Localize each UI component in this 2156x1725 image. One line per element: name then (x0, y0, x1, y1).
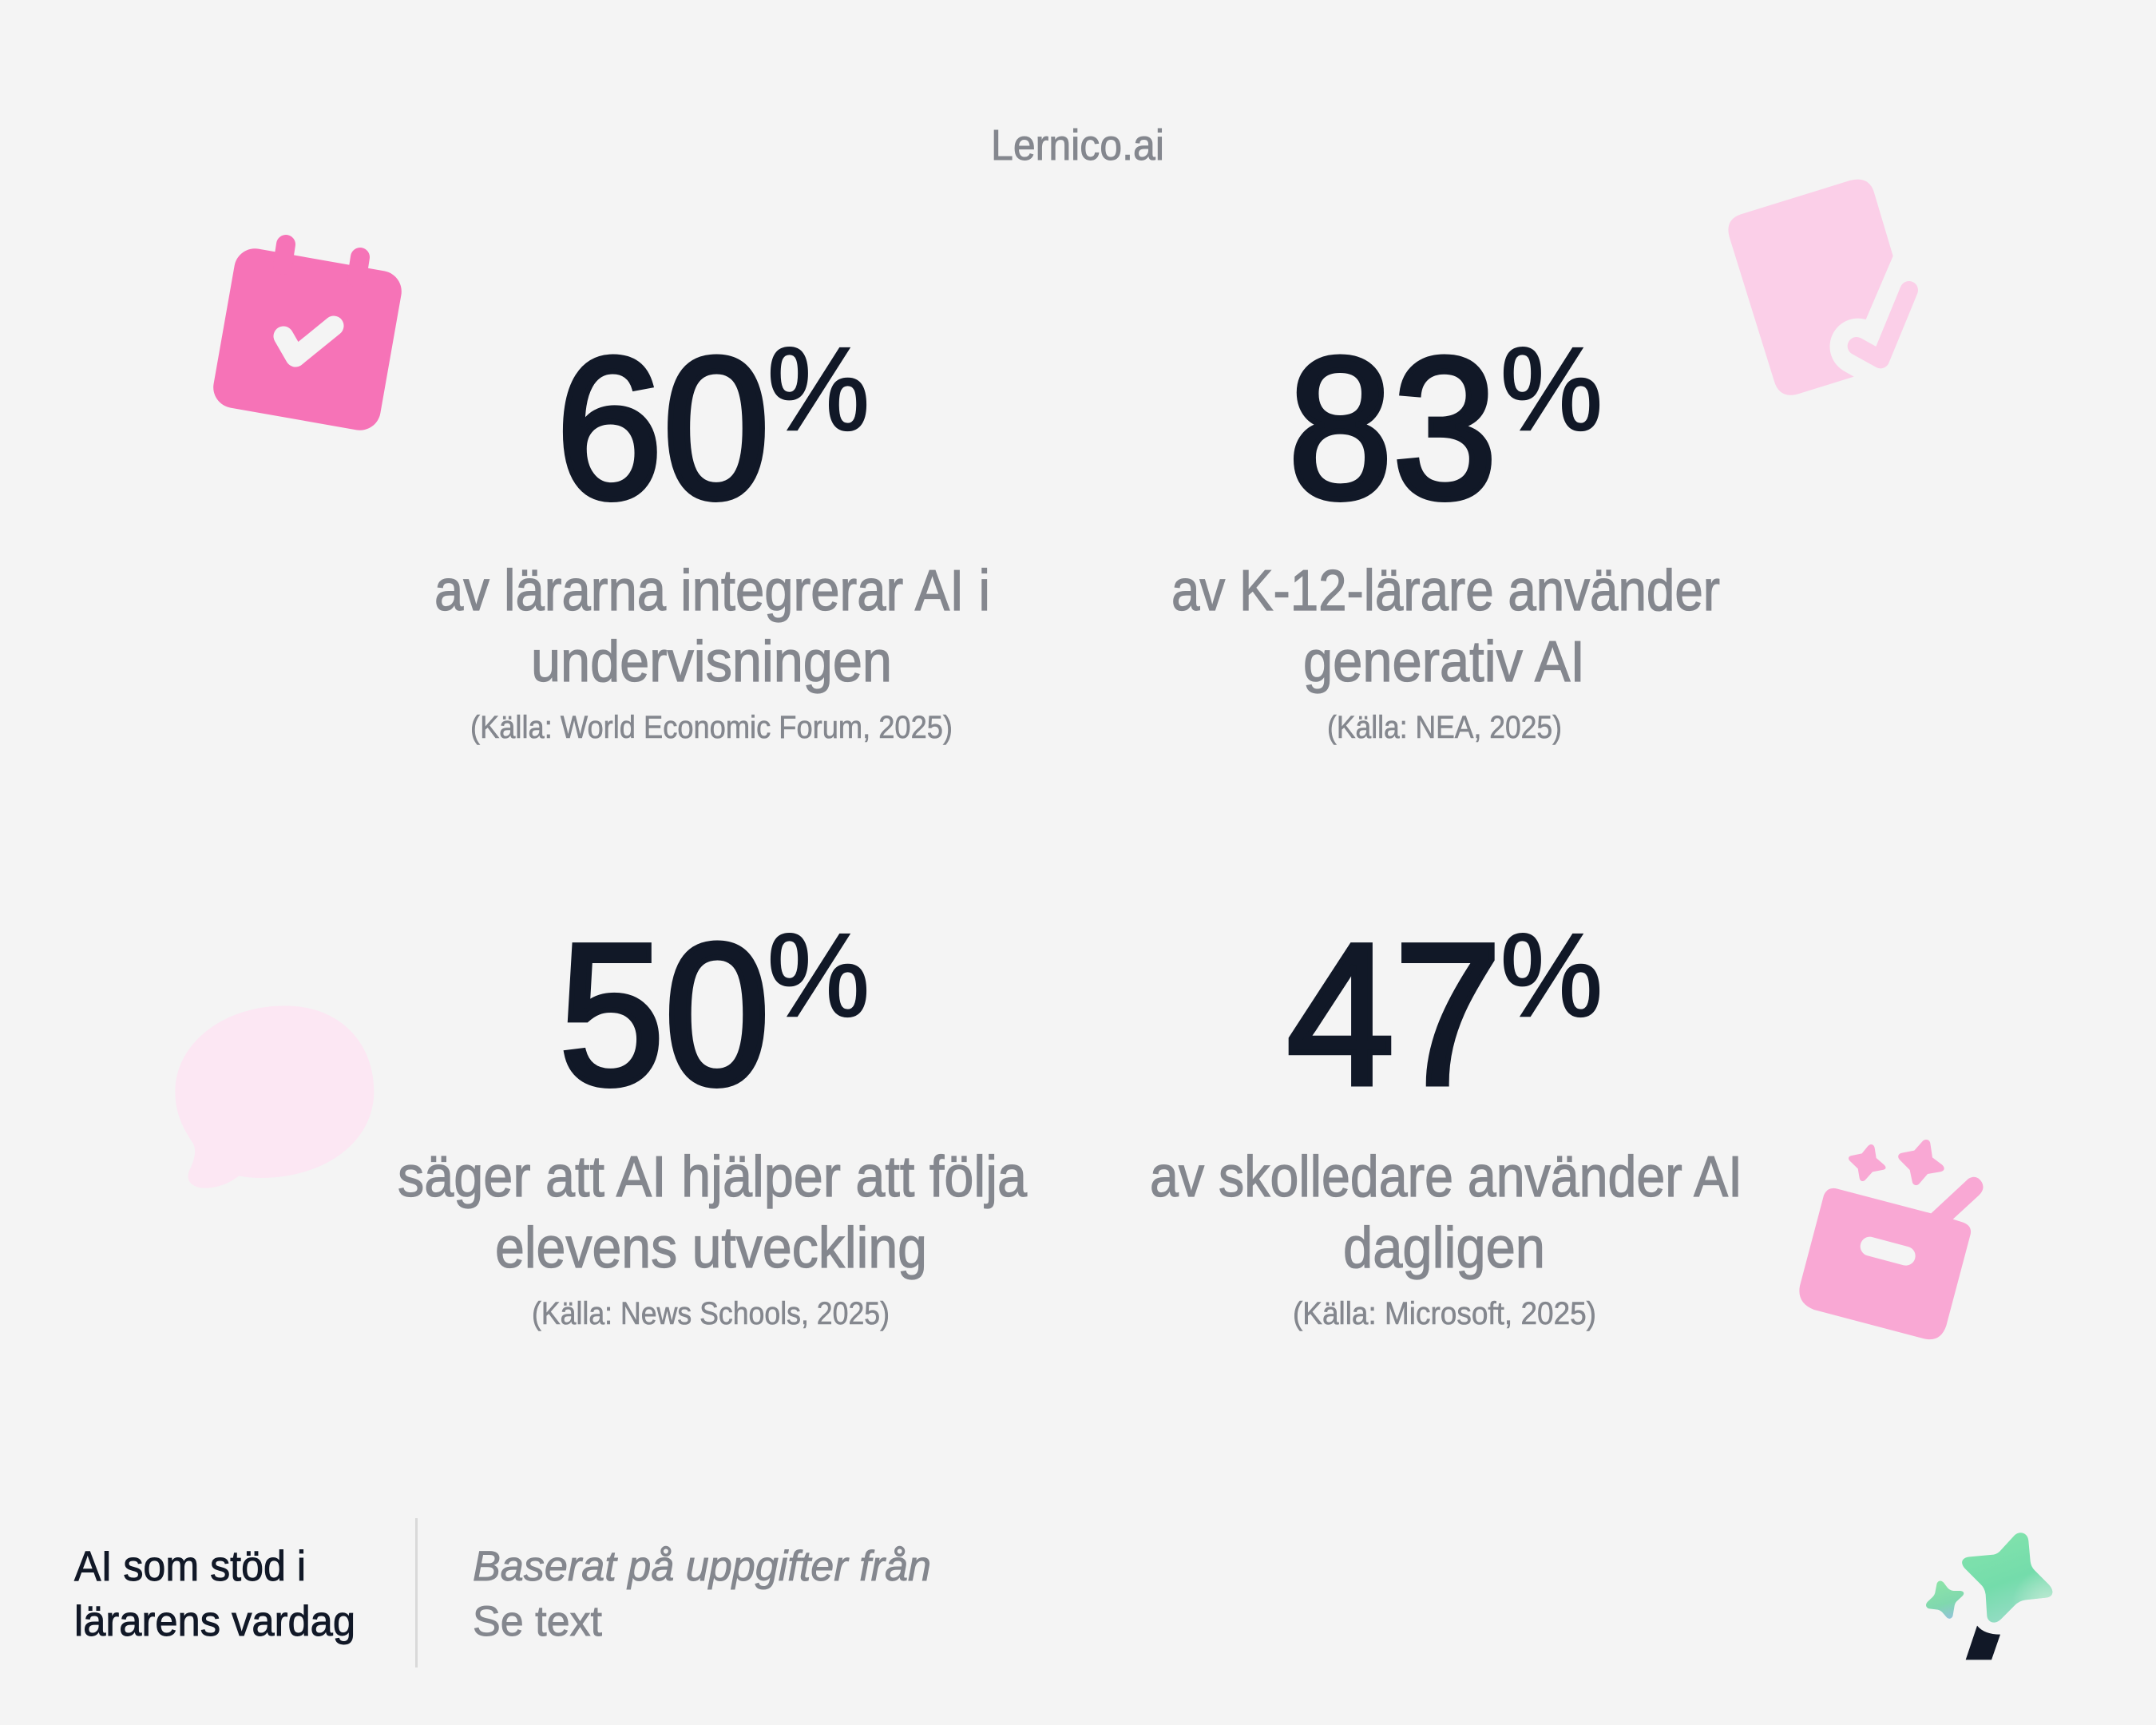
number 50: 50 (559, 902, 770, 1127)
percent sign: % (1500, 323, 1603, 455)
stat: 60 percent (434, 316, 990, 745)
caption: undervisningen (531, 630, 892, 694)
logo: green stars and wand (1926, 1533, 2052, 1660)
percent sign: % (1500, 910, 1603, 1041)
percent sign: % (767, 910, 870, 1041)
number 83: 83 (1288, 316, 1497, 541)
icon: box with sparkles (1799, 1140, 1984, 1339)
source: (Källa: News Schools, 2025) (532, 1296, 890, 1331)
source: (Källa: Microsoft, 2025) (1293, 1296, 1596, 1331)
icon: calendar with check (210, 244, 405, 434)
caption: säger att AI hjälper att följa (398, 1145, 1028, 1209)
source: (Källa: World Economic Forum, 2025) (470, 710, 953, 745)
stat: 83 percent (1171, 316, 1720, 745)
footer source note: Baserat på uppgifter från (473, 1543, 931, 1590)
icon: speech bubble (175, 1005, 374, 1188)
footer source note: Se text (473, 1598, 602, 1645)
caption: av skolledare använder AI (1150, 1145, 1742, 1209)
number 60: 60 (556, 316, 770, 541)
caption: elevens utveckling (495, 1216, 927, 1280)
footer title: AI som stöd i (74, 1543, 306, 1590)
caption: av lärarna integrerar AI i (434, 559, 990, 623)
brand heading: Lernico.ai (991, 121, 1164, 169)
stat: 47 percent (1150, 902, 1742, 1331)
icon: document with check (1728, 180, 1909, 395)
number 47: 47 (1287, 902, 1501, 1127)
percent sign: % (767, 323, 870, 455)
caption: generativ AI (1303, 630, 1585, 694)
caption: dagligen (1343, 1216, 1545, 1280)
footer title: lärarens vardag (74, 1598, 355, 1645)
source: (Källa: NEA, 2025) (1327, 710, 1562, 745)
stat: 50 percent (398, 902, 1028, 1331)
caption: av K-12-lärare använder (1171, 559, 1720, 623)
